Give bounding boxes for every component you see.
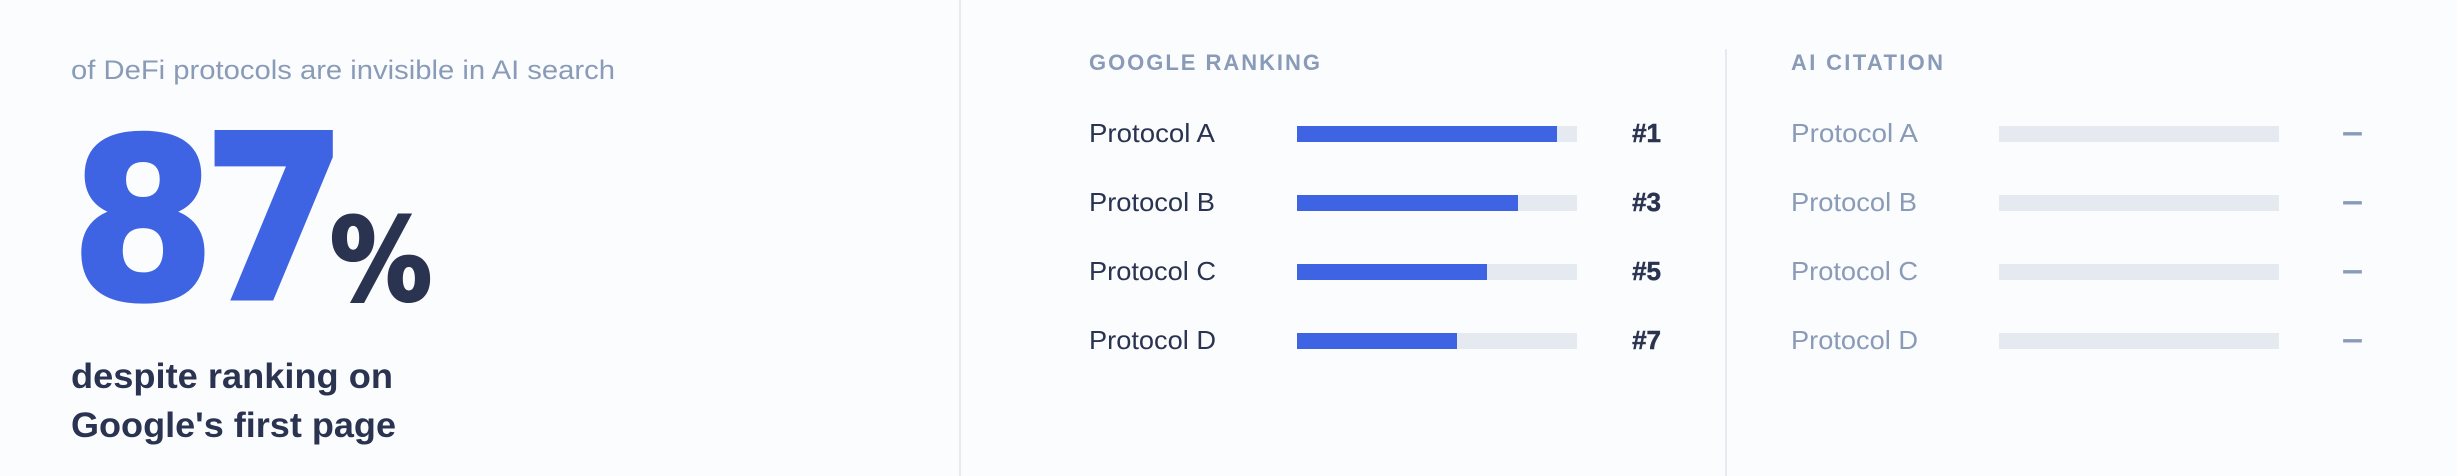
row: Protocol C: #5 [1632, 256, 1661, 286]
row: Protocol B: Protocol B [1791, 187, 1917, 217]
row: Protocol B: – [2342, 182, 2363, 220]
row: Protocol C: – [2342, 251, 2363, 289]
row: Protocol D [1089, 325, 1661, 355]
row: Protocol A [1089, 118, 1661, 148]
panel: headline statistic [71, 55, 615, 445]
row: Protocol B [1089, 187, 1661, 217]
subtext: Google's first page [71, 406, 396, 445]
row: Protocol C: Protocol C [1791, 256, 1918, 286]
panel: Google ranking [1089, 50, 1661, 355]
row: Protocol B: #3 [1632, 187, 1661, 217]
big number 87 [71, 87, 347, 352]
panel: AI citation [1791, 50, 2363, 358]
row: Protocol B: Protocol B [1089, 187, 1215, 217]
row: Protocol D: Protocol D [1089, 325, 1216, 355]
row: Protocol D: Protocol D [1791, 325, 1918, 355]
row: Protocol A: Protocol A [1791, 118, 1919, 148]
row: Protocol A: – [2342, 113, 2363, 151]
row: Protocol A: #1 [1632, 118, 1661, 148]
intro text: of DeFi protocols are invisible in AI search [71, 55, 615, 85]
row: Protocol C: Protocol C [1089, 256, 1216, 286]
row: Protocol D: #7 [1632, 325, 1661, 355]
heading: GOOGLE RANKING [1089, 50, 1320, 75]
row: Protocol D: – [2342, 320, 2363, 358]
row: Protocol C [1791, 251, 2363, 289]
row: Protocol D [1791, 320, 2363, 358]
row: Protocol A: Protocol A [1089, 118, 1216, 148]
subtext: despite ranking on [71, 357, 393, 396]
row: Protocol C [1089, 256, 1661, 286]
heading: AI CITATION [1791, 50, 1943, 75]
row: Protocol A [1791, 113, 2363, 151]
percent sign: % [330, 194, 432, 327]
big number 87: 8 [71, 93, 215, 351]
row: Protocol B [1791, 182, 2363, 220]
big number 87: 7 [203, 87, 347, 352]
subtext [71, 357, 396, 445]
